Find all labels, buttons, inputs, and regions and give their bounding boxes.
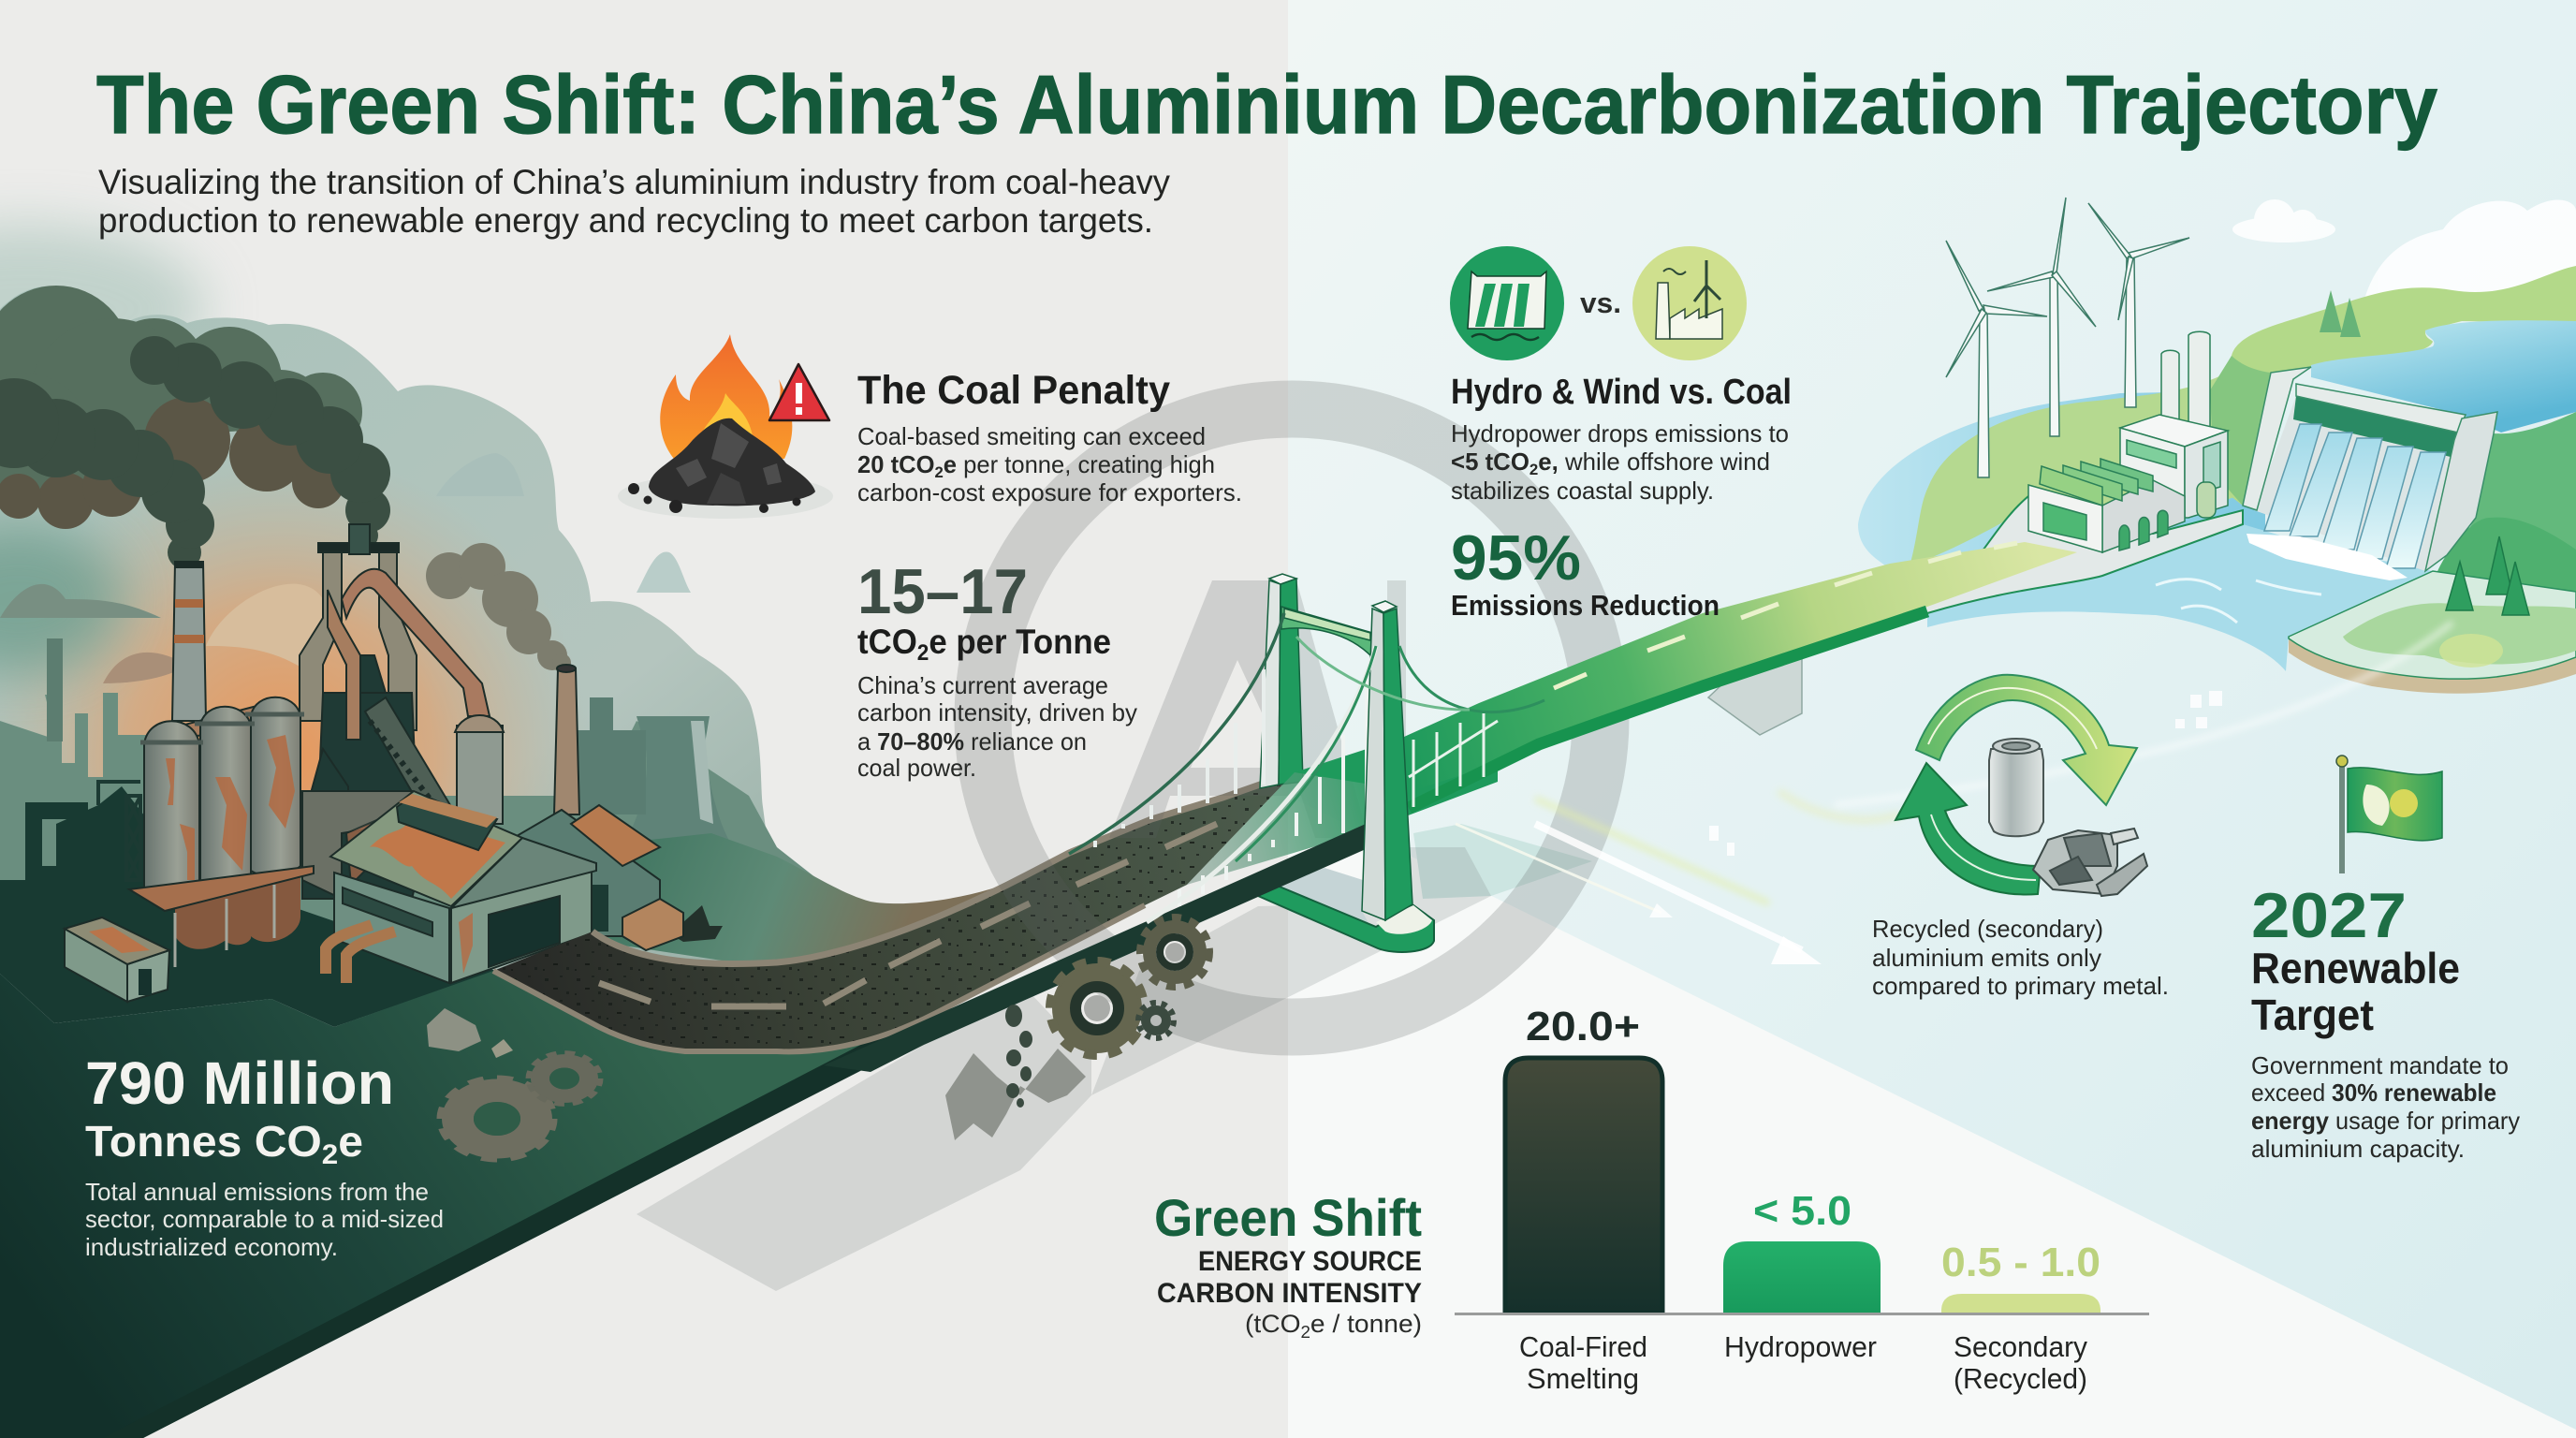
text: 790 million stat: industrialized economy.	[85, 1233, 338, 1261]
mid smoke plume	[426, 543, 571, 672]
text: 2027 target: exceed 30% renewable	[2251, 1078, 2496, 1107]
green factory	[2028, 331, 2228, 552]
text: recycled aluminium	[1872, 915, 2169, 1000]
front and right cables	[1147, 646, 1376, 922]
text: 95 percent stat: 95%	[1451, 522, 1581, 594]
text: 15-17 stat: tCO	[857, 623, 921, 661]
cliff right of dam	[2434, 412, 2576, 599]
watermark ring and letters	[983, 409, 1601, 1027]
dark smoke from chimneys	[0, 286, 390, 569]
warning triangle	[769, 364, 829, 420]
back tower	[1260, 574, 1303, 788]
text: 15-17 stat: e per Tonne	[929, 623, 1111, 661]
text: 15-17 stat: 15–17	[857, 556, 1028, 627]
green road dashes	[1554, 543, 2017, 688]
front tower	[1362, 601, 1412, 920]
distant skyline and cooling tower	[0, 638, 842, 936]
hill above dam	[2210, 266, 2576, 506]
text: recycled aluminium: aluminium emits only	[1872, 944, 2101, 972]
suspension bridge	[824, 542, 2077, 1140]
rocks	[427, 1008, 513, 1058]
bar: hydropower: < 5.0	[1753, 1188, 1852, 1234]
bar: hydropower	[1723, 1188, 1881, 1313]
outbuilding	[65, 917, 169, 1002]
dark coal road	[493, 772, 1295, 1051]
text: 790 million stat: Tonnes CO	[85, 1117, 312, 1166]
green road	[1295, 542, 2077, 791]
text: recycled aluminium: compared to primary metal.	[1872, 972, 2169, 1000]
road dashes	[599, 824, 1217, 1006]
text: the coal penalty: The Coal Penalty	[857, 368, 1170, 413]
chart heading	[1154, 1188, 1422, 1342]
text: the coal penalty: 2	[934, 463, 944, 481]
clouds	[2232, 199, 2576, 328]
text: the coal penalty: per tonne, creating high	[963, 450, 1219, 478]
pale distant clouds	[0, 453, 691, 683]
text: 2027 target: 2027	[2251, 880, 2407, 951]
upper lake	[2311, 320, 2576, 433]
island	[2289, 571, 2576, 694]
text: 2027 target: Target	[2251, 990, 2374, 1039]
dam posts and beam	[2243, 367, 2497, 571]
bar: secondary	[1941, 1240, 2100, 1313]
text: 15-17 stat: a 70–80% reliance on	[857, 727, 1087, 756]
hot blast main	[342, 569, 490, 716]
chart heading: ENERGY SOURCE	[1198, 1246, 1422, 1277]
icon: burning coal with warning	[618, 334, 833, 519]
text: 95 percent stat: Emissions Reduction	[1451, 589, 1720, 622]
left land	[1910, 370, 2265, 566]
second chimney	[554, 665, 579, 814]
text: recycled aluminium: Recycled (secondary)	[1872, 915, 2103, 943]
hall	[2102, 480, 2185, 552]
category labels: Secondary	[1954, 1330, 2087, 1363]
crushed scrap	[2033, 829, 2147, 896]
tower base plate	[1258, 885, 1434, 952]
text: 790 million stat: 2	[322, 1139, 338, 1170]
chart heading: 2	[1300, 1323, 1310, 1342]
text: 2027 target: aluminium capacity.	[2251, 1135, 2465, 1163]
light streaks and arrows	[1456, 623, 2452, 964]
text: 790 million stat: 790 Million	[85, 1049, 394, 1117]
lower ground	[0, 786, 941, 1438]
deck hangers on green	[1409, 713, 1498, 807]
text: hydro and wind vs coal: Hydropower drops emissions to	[1451, 419, 1789, 448]
chart heading: CARBON INTENSITY	[1157, 1278, 1422, 1309]
text: hydro and wind vs coal: Hydro & Wind vs. Coal	[1451, 373, 1792, 412]
crumbling rubble	[945, 1005, 1086, 1140]
text: 2027 target: Government mandate to	[2251, 1051, 2509, 1079]
category labels: Coal-Fired	[1519, 1330, 1647, 1363]
subtitle: production to renewable energy and recycling to meet carbon targets.	[98, 201, 1153, 240]
subtitle	[98, 163, 1170, 240]
icon: recycling loop	[1895, 675, 2147, 896]
foreground water	[1927, 524, 2433, 671]
bar: secondary: 0.5 - 1.0	[1941, 1240, 2100, 1285]
text: 15-17 stat: carbon intensity, driven by	[857, 698, 1137, 726]
coal side haze and smog	[0, 225, 936, 1030]
vs label: vs.	[1580, 286, 1621, 319]
foam	[2247, 534, 2408, 580]
gears under deck	[1050, 917, 1209, 1055]
text: 15-17 stat: 2	[917, 640, 929, 666]
category labels	[1519, 1330, 2087, 1395]
text: 2027 target: Renewable	[2251, 944, 2460, 992]
under-deck beam	[824, 824, 1366, 1072]
text: hydro and wind vs coal: while offshore wind	[1565, 448, 1772, 476]
text: 790 million stat: Total annual emissions from the	[85, 1178, 429, 1206]
axis line	[1455, 1313, 2149, 1315]
chart heading: (tCO	[1245, 1310, 1298, 1338]
hydro dam	[2243, 367, 2497, 580]
text: 790 million stat: e	[338, 1117, 363, 1166]
waterfront plaza	[1919, 496, 2243, 613]
left bay	[1858, 390, 2265, 576]
silos	[129, 697, 314, 967]
text: the coal penalty: 20 tCO	[857, 450, 957, 481]
icon: renewable flag	[2336, 756, 2442, 873]
ground pipes	[326, 925, 395, 983]
text: 15-17 stat: coal power.	[857, 754, 976, 782]
subtitle: Visualizing the transition of China’s aluminium industry from coal-heavy	[98, 163, 1170, 201]
main shed	[330, 791, 596, 983]
text: 2027 target	[2251, 880, 2520, 1163]
gears on ground	[441, 1053, 600, 1159]
category labels: (Recycled)	[1954, 1362, 2087, 1395]
blast furnace	[300, 524, 504, 899]
factory complex	[65, 524, 683, 1002]
pine trees	[2446, 536, 2529, 615]
text: the coal penalty: e	[944, 450, 957, 478]
green landscape	[1858, 199, 2576, 694]
cross beam	[1281, 607, 1372, 657]
bridge pier	[1708, 651, 1802, 735]
wind turbines	[1946, 198, 2189, 477]
text: 95 percent stat	[1451, 522, 1720, 622]
text: 15-17 stat: China’s current average	[857, 671, 1108, 699]
annex building	[505, 805, 683, 950]
front hangers	[1179, 674, 1367, 906]
category labels: Hydropower	[1724, 1330, 1877, 1363]
chart heading: e / tonne)	[1310, 1310, 1422, 1338]
title: The Green Shift: China’s Aluminium Decarbonization Trajectory	[96, 58, 2437, 151]
text: 15-17 stat	[857, 556, 1137, 782]
icon: hydropower badge	[1450, 246, 1564, 360]
chart heading: Green Shift	[1154, 1188, 1422, 1247]
text: the coal penalty: Coal-based smeiting can exceed	[857, 422, 1206, 450]
fence deck section	[1187, 710, 1498, 885]
text: hydro and wind vs coal: e,	[1538, 448, 1559, 476]
connecting pipe	[168, 702, 276, 744]
text: 2027 target: energy usage for primary	[2251, 1107, 2520, 1135]
text: hydro and wind vs coal: <5 tCO	[1451, 448, 1559, 478]
lattice tower and pipework	[98, 782, 140, 880]
text: hydro and wind vs coal	[1451, 373, 1792, 505]
conveyor	[365, 697, 459, 824]
text: 790 million stat	[85, 1049, 444, 1261]
category labels: Smelting	[1527, 1362, 1639, 1395]
small trees	[2320, 290, 2361, 337]
bar: coal-fired	[1505, 1004, 1662, 1313]
text: hydro and wind vs coal: 2	[1530, 461, 1538, 478]
aluminium can	[1989, 739, 2043, 836]
main chimney	[172, 562, 206, 721]
bar chart	[1455, 1004, 2149, 1395]
text: hydro and wind vs coal: stabilizes coastal supply.	[1451, 477, 1714, 505]
text: the coal penalty	[857, 368, 1242, 506]
text: 790 million stat: sector, comparable to a mid-sized	[85, 1205, 444, 1233]
icon: wind and factory badge	[1632, 246, 1747, 360]
text: the coal penalty: carbon-cost exposure for exporters.	[857, 478, 1242, 506]
green hillside	[580, 833, 1030, 969]
under-bridge road shadow	[637, 824, 1592, 1291]
left cable and hangers	[1095, 669, 1264, 847]
bar: coal-fired: 20.0+	[1526, 1004, 1640, 1049]
